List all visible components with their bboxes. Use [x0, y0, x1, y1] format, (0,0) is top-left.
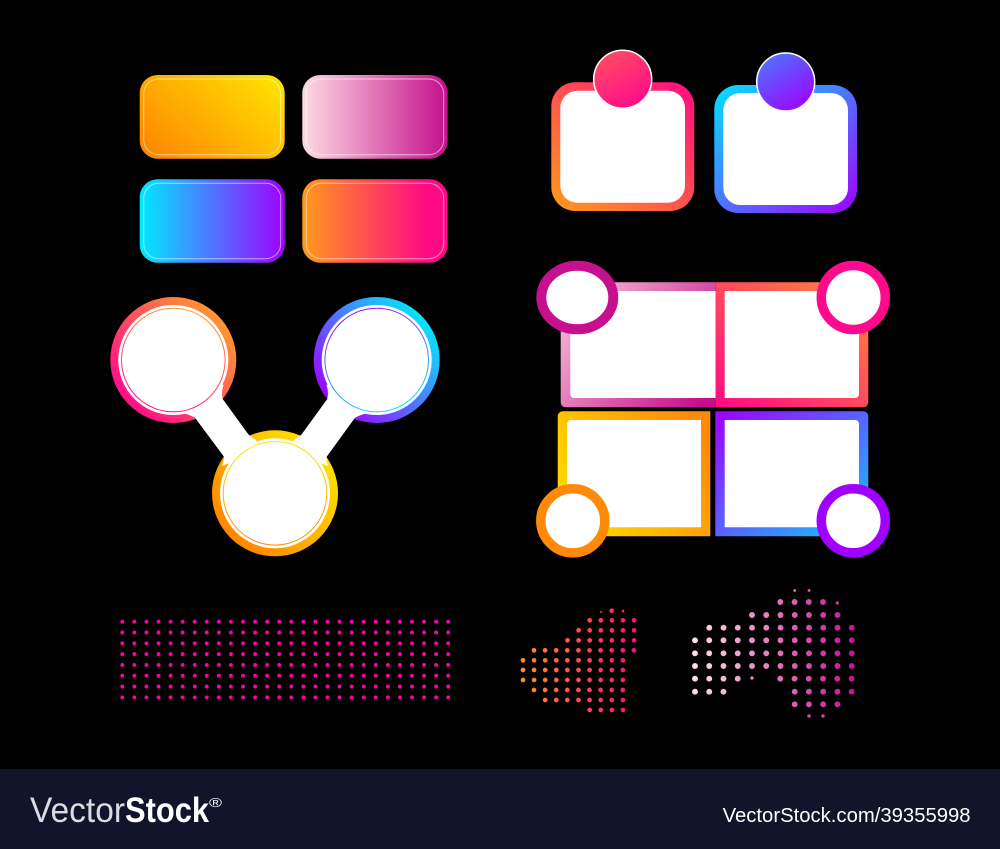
logo: VectorStock [30, 791, 223, 830]
inner ring: bottom circle [223, 442, 327, 545]
note card: orange pink [551, 50, 694, 211]
badge: top right [821, 266, 885, 330]
badge: bottom left [541, 489, 605, 553]
halftone: clipped edge dots [600, 589, 839, 718]
logo: VectorStock: Vector [30, 791, 125, 830]
circle: orange yellow [212, 430, 338, 556]
panel: connected circles diagram [110, 297, 440, 556]
panel: gradient label cards [140, 75, 448, 263]
frame: bottom right [715, 411, 868, 536]
card: yellow orange [140, 75, 285, 159]
circle: pink orange [110, 297, 236, 423]
halftone: large blob [695, 602, 852, 704]
badge: top left [541, 266, 613, 329]
note card: cyan purple [714, 53, 857, 213]
frame: bottom left [558, 411, 710, 536]
connector: right arm [288, 370, 367, 466]
card: orange pink [302, 179, 448, 263]
inner ring: right circle [325, 308, 429, 412]
frame: top right [716, 282, 868, 407]
image id text: VectorStock.com/39355998 [723, 805, 971, 827]
logo: VectorStock: Stock [125, 791, 209, 830]
card: pink magenta [302, 75, 448, 159]
logo: VectorStock: ® [209, 795, 223, 810]
halftone: small blob [523, 611, 635, 710]
badge: bottom right [821, 489, 885, 553]
footer bar [0, 769, 1000, 849]
frame: top left [561, 282, 716, 407]
panel: note cards with circle badges [551, 50, 857, 213]
halftone: dot grid [122, 622, 449, 697]
connector: left arm [183, 370, 262, 466]
card: cyan purple [140, 179, 285, 263]
circle: purple cyan [314, 297, 440, 423]
inner ring: left circle [122, 308, 225, 412]
panel: four-part frame grid [541, 266, 885, 553]
